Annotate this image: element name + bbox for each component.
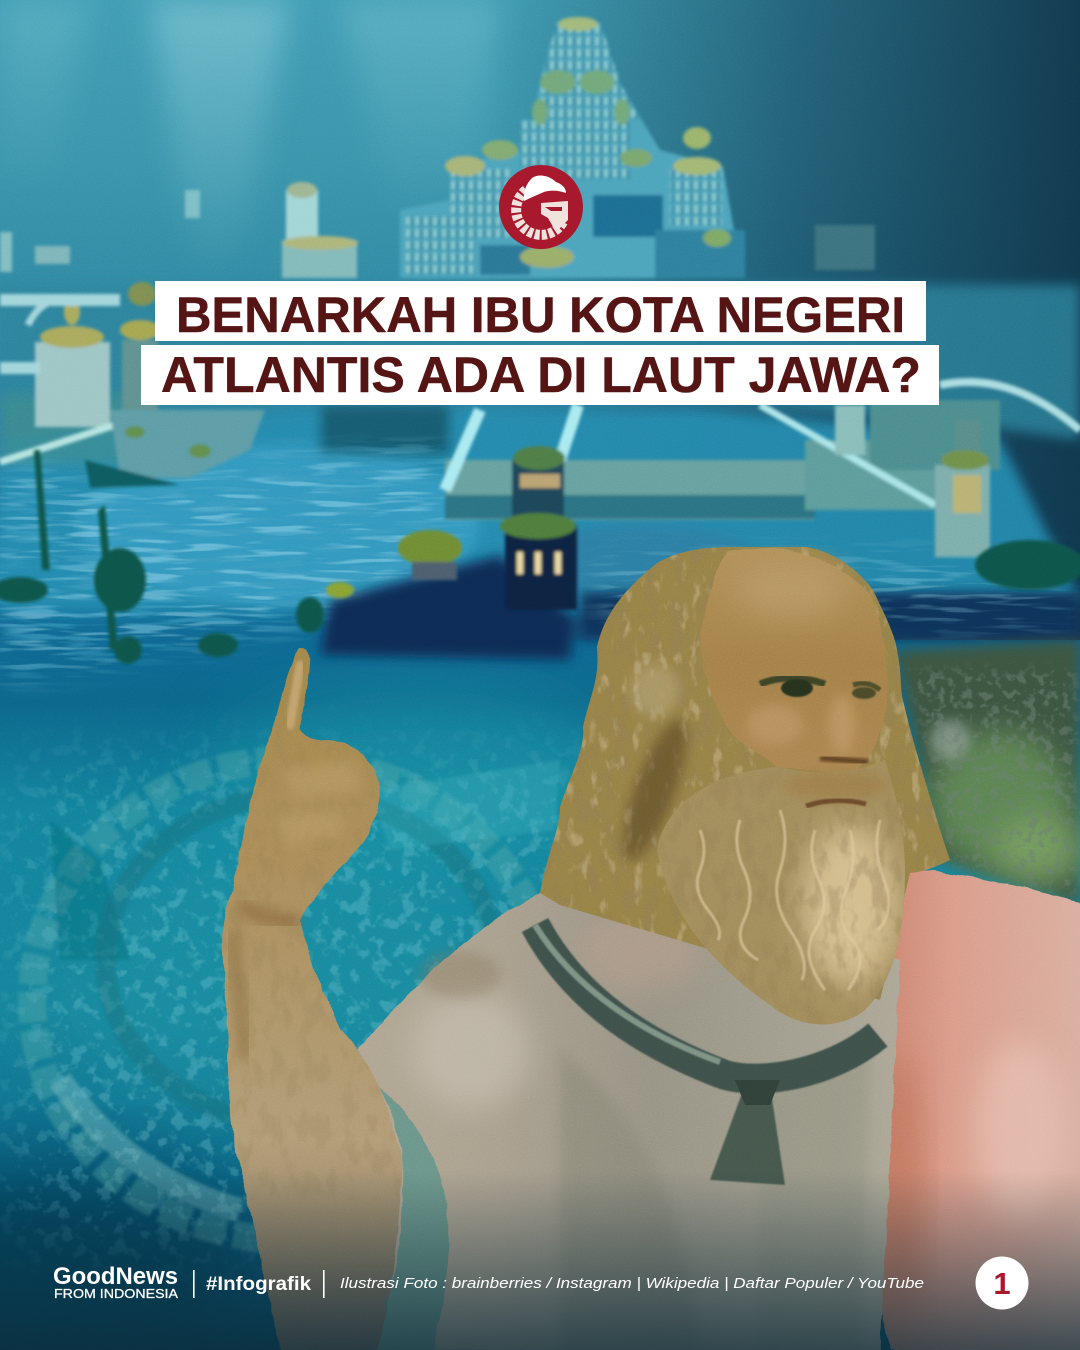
arm and raised hand <box>215 640 405 1350</box>
page number <box>976 1256 1028 1310</box>
page number: 1 <box>993 1266 1011 1301</box>
beard <box>650 755 910 1035</box>
footer <box>53 1256 1028 1310</box>
robe body <box>280 890 900 1350</box>
ripple texture on seabed <box>0 430 480 700</box>
mottled ruins texture in deep water <box>0 742 570 1256</box>
title <box>141 281 939 405</box>
photo credits: Ilustrasi Foto : brainberries / Instagram | Wikipedia | Daftar Populer / YouTube <box>340 1275 924 1292</box>
main palace <box>400 17 745 278</box>
hashtag: #Infografik <box>206 1274 311 1295</box>
footer shade <box>0 1170 1080 1350</box>
side buildings <box>0 182 875 488</box>
hair <box>530 540 960 1010</box>
dark shoals near the towers <box>320 555 1080 660</box>
city plaza and water <box>0 285 1080 610</box>
face <box>700 548 888 775</box>
necklace cord and pendant <box>535 925 878 1185</box>
eyes, nose and mouth <box>760 678 880 806</box>
dark shrubs along the shore <box>0 450 1080 664</box>
walls, bridges and towers <box>398 382 1080 610</box>
mantle: pink drapery <box>865 868 1080 1350</box>
title line 2: ATLANTIS ADA DI LAUT JAWA? <box>161 347 921 403</box>
rocky green island on the right <box>880 640 1080 910</box>
title line 1: BENARKAH IBU KOTA NEGERI <box>176 287 905 343</box>
logo: GoodNews Garuda badge <box>499 165 583 249</box>
brand: GoodNews from Indonesia: GoodNews <box>53 1263 178 1290</box>
brand: GoodNews from Indonesia: FROM INDONESIA <box>54 1287 179 1301</box>
figure: Plato pointing upward <box>215 540 1080 1350</box>
submerged ring ruins <box>32 760 560 1240</box>
teal sleeve lining <box>377 1088 448 1350</box>
